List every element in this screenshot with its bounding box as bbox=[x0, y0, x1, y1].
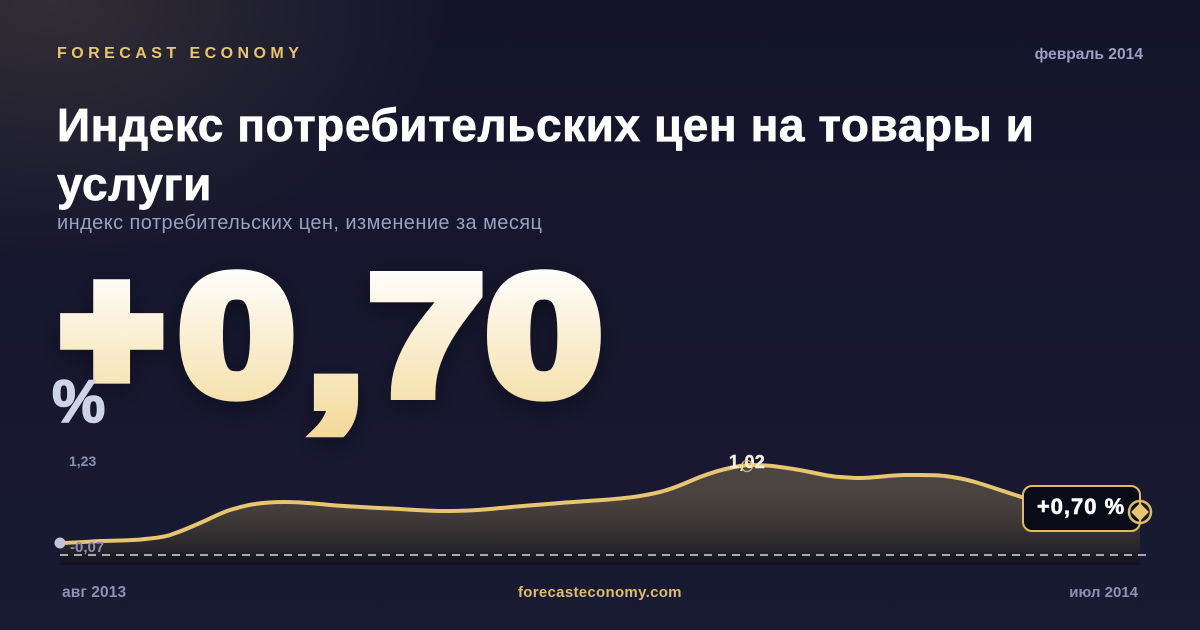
brand label: FORECAST ECONOMY bbox=[57, 45, 303, 62]
source link: forecasteconomy.com bbox=[518, 584, 682, 601]
start point marker bbox=[54, 538, 66, 548]
current value callout bbox=[1023, 486, 1140, 531]
zero baseline bbox=[60, 554, 1147, 556]
hero value: 0,70 bbox=[179, 241, 602, 442]
peak label: 1,02 bbox=[729, 452, 765, 472]
hero value: + bbox=[62, 235, 161, 425]
x axis end label: июл 2014 bbox=[1069, 584, 1138, 601]
axis min label: -0,07 bbox=[70, 539, 104, 556]
x axis start label: авг 2013 bbox=[62, 584, 126, 601]
subtitle: индекс потребительских цен, изменение за месяц bbox=[57, 212, 542, 234]
axis max label: 1,23 bbox=[69, 453, 96, 469]
title: услуги bbox=[57, 158, 212, 210]
unit percent: % bbox=[52, 368, 105, 435]
chart line bbox=[60, 465, 1140, 543]
title bbox=[56, 99, 1034, 210]
current point marker bbox=[1129, 501, 1151, 523]
current value callout: +0,70 % bbox=[1037, 494, 1125, 519]
chart area fill bbox=[60, 465, 1140, 565]
date label: февраль 2014 bbox=[1035, 46, 1143, 63]
title: Индекс потребительских цен на товары и bbox=[57, 99, 1034, 151]
